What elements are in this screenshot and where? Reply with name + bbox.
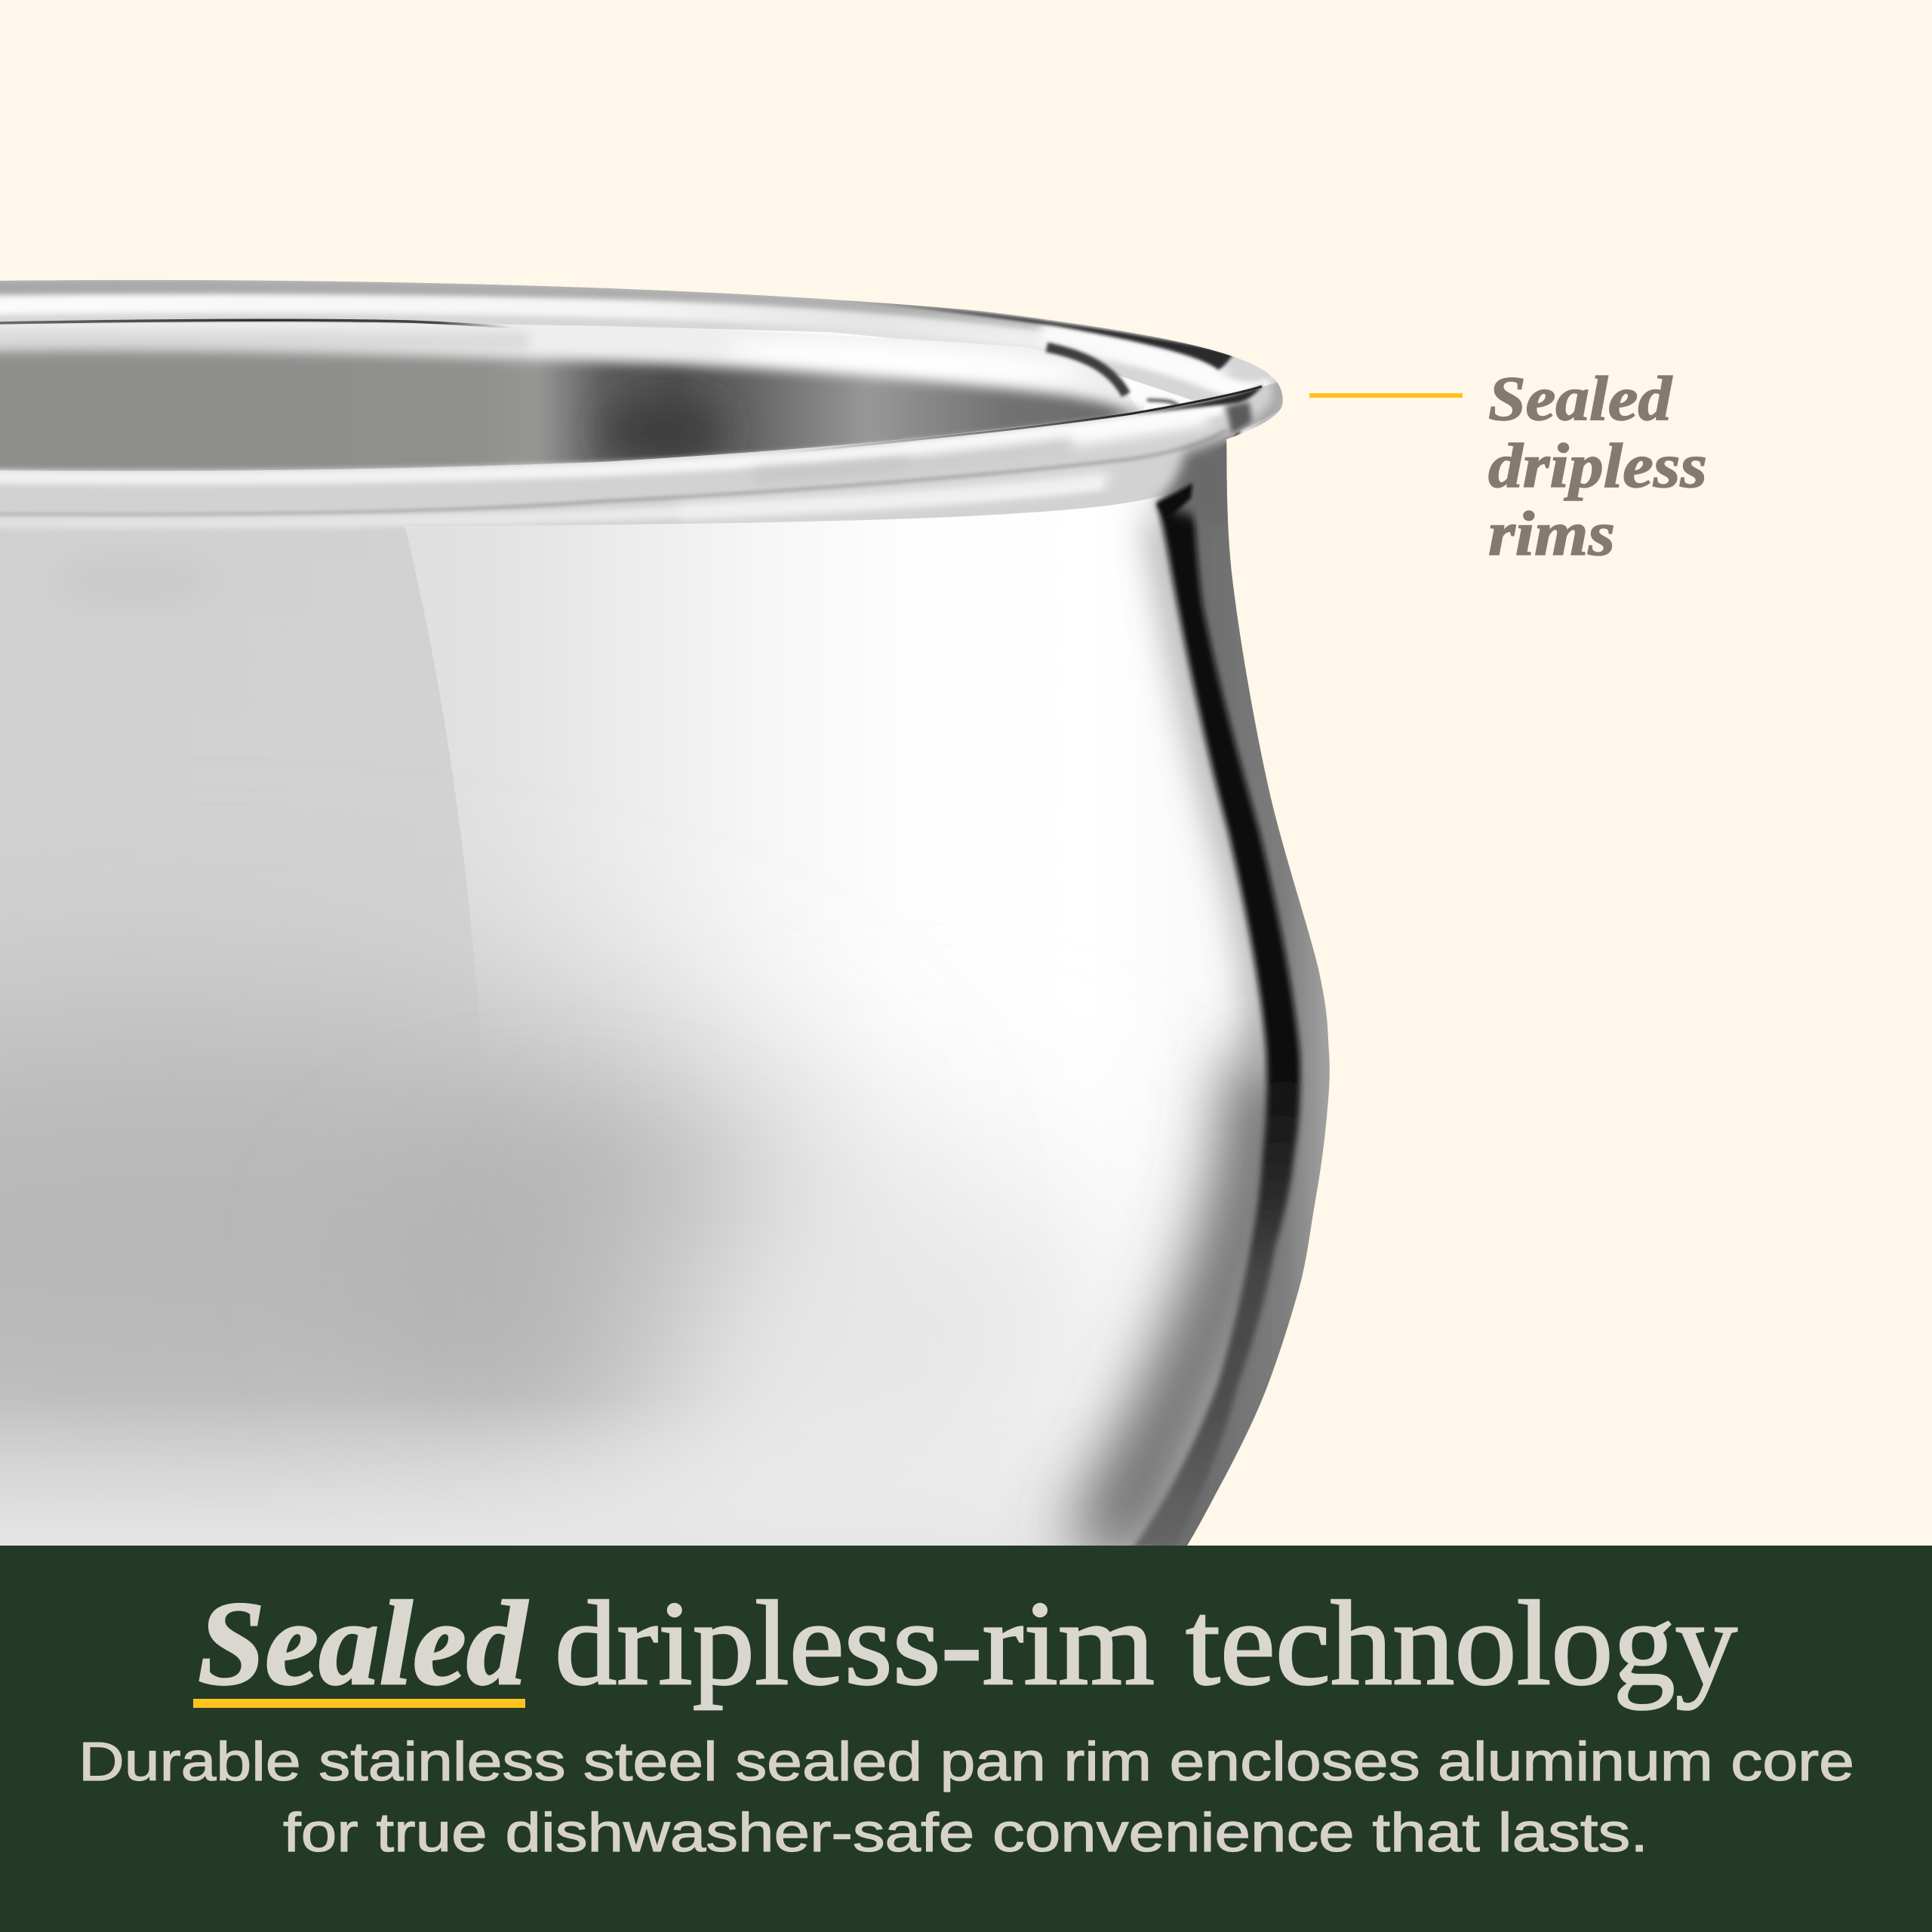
heading underline [193,1699,525,1708]
upper highlight of rim [0,408,1223,478]
stainless steel pan photo [0,272,1358,1555]
supporting text: for true dishwasher-safe convenience that lasts. [283,1803,1648,1863]
rim tip edge shade [1253,377,1281,427]
small rim notch [1147,400,1179,406]
mid gray of rim [755,445,1072,475]
rim tip reflection [1226,401,1253,435]
black reflection band [1132,483,1300,1549]
callout leader line [1309,393,1463,398]
fold line [0,430,1226,515]
dark top edge of rim [823,297,1233,370]
shadow under rim [1155,434,1238,528]
outer reflected band [1159,430,1330,1546]
white band [0,304,1275,391]
inner wall highlight [0,323,1140,411]
callout text: dripless [1488,431,1707,501]
lower rim [0,381,1287,527]
interior rim shadow line [0,320,513,328]
inner pan floor [0,343,1144,471]
callout text: Sealed [1488,364,1673,434]
upper rim [0,280,1275,405]
heading: Sealed [198,1576,528,1710]
rim inner edge line [785,386,1262,453]
callout: sealed dripless rims [1309,364,1723,569]
pan body [0,272,1343,1547]
supporting text: Durable stainless steel sealed pan rim encloses aluminum core [78,1732,1854,1792]
dark curved rim reflection [1047,347,1126,395]
callout text: rims [1488,499,1615,569]
panel: green footer [0,1546,1932,1932]
lower highlight of rim [0,483,1102,523]
edge shading on pan body [1102,513,1268,1555]
heading: dripless-rim technology [555,1576,1737,1710]
gray top edge [0,287,1041,328]
